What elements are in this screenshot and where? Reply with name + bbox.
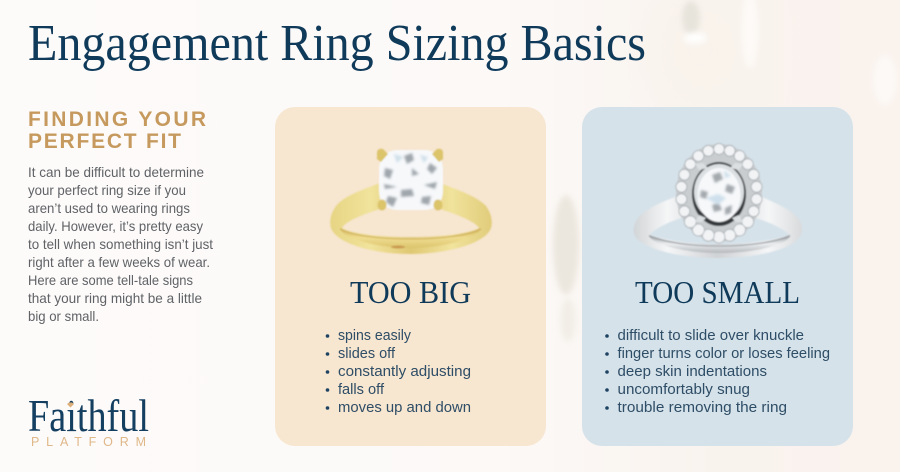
heading: too small: TOO SMALL bbox=[635, 274, 800, 310]
intro text block: right after a few weeks of wear. bbox=[28, 254, 210, 270]
list: too small signs: deep skin indentations bbox=[618, 363, 767, 380]
intro text block bbox=[28, 164, 213, 324]
heading: finding your perfect fit bbox=[28, 108, 206, 153]
list: too small signs bbox=[605, 327, 830, 416]
list: too big signs: falls off bbox=[338, 381, 385, 398]
heading: finding your perfect fit: PERFECT FIT bbox=[28, 130, 181, 153]
list: too small signs: finger turns color or loses feeling bbox=[618, 345, 830, 362]
heading: finding your perfect fit: FINDING YOUR bbox=[28, 108, 206, 131]
list: too small signs: difficult to slide over knuckle bbox=[618, 327, 804, 344]
diamond bbox=[379, 150, 443, 210]
intro text block: to tell when something isn’t just bbox=[28, 236, 213, 252]
halo bbox=[676, 144, 762, 242]
title: Engagement Ring Sizing Basics bbox=[28, 15, 646, 72]
center oval diamond bbox=[698, 168, 740, 222]
prongs bbox=[695, 163, 743, 222]
list: too big signs: spins easily bbox=[338, 327, 411, 344]
list: too small signs: trouble removing the ring bbox=[618, 399, 787, 416]
icon: gold solitaire ring bbox=[330, 149, 492, 254]
list: too big signs: moves up and down bbox=[338, 399, 471, 416]
list: too big signs: slides off bbox=[338, 345, 396, 362]
intro text block: big or small. bbox=[28, 308, 99, 324]
intro text block: that your ring might be a little bbox=[28, 290, 202, 306]
list: too small signs: uncomfortably snug bbox=[618, 381, 750, 398]
logo: Faithful Platform: Faithful bbox=[28, 390, 149, 441]
intro text block: daily. However, it’s pretty easy bbox=[28, 218, 203, 234]
intro text block: aren’t used to wearing rings bbox=[28, 200, 190, 216]
prongs bbox=[377, 149, 443, 210]
heading: too big: TOO BIG bbox=[350, 274, 471, 310]
logo: Faithful Platform: PLATFORM bbox=[31, 435, 146, 449]
intro text block: Here are some tell-tale signs bbox=[28, 272, 193, 288]
panel: too big bbox=[275, 107, 546, 446]
intro text block: It can be difficult to determine bbox=[28, 164, 204, 180]
intro text block: your perfect ring size if you bbox=[28, 182, 186, 198]
panel: too small bbox=[582, 107, 853, 446]
icon: silver halo ring bbox=[634, 144, 802, 258]
list: too big signs bbox=[326, 327, 471, 416]
list: too big signs: constantly adjusting bbox=[338, 363, 471, 380]
